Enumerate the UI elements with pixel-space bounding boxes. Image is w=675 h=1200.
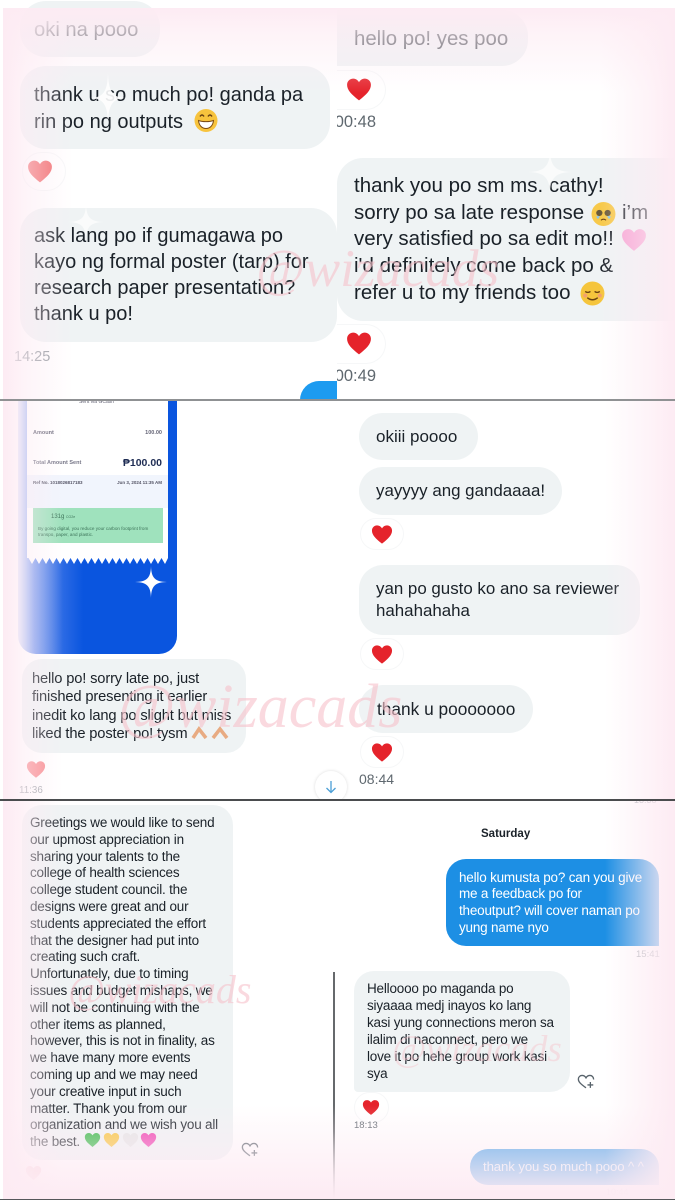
- receipt reference strip: Ref No. 1018026817183: [33, 480, 83, 485]
- message bubble: ask lang po: [20, 208, 337, 342]
- reaction: heart: [360, 736, 404, 768]
- message text: okiii poooo: okiii poooo: [376, 427, 457, 446]
- message text: greetings: will not be continuing with the: [30, 1000, 199, 1015]
- panel: chat screenshot 1: [3, 1, 675, 399]
- timestamp: 15:41: 15:41: [636, 949, 660, 960]
- message text: hello po sorry late: hello po! sorry late po, just: [32, 671, 199, 687]
- pink frame overlay: [3, 400, 675, 800]
- reaction: heart: [337, 70, 386, 110]
- message text: greetings: other items as planned,: [30, 1017, 166, 1032]
- message text: thank u pooooooo: thank u pooooooo: [377, 699, 515, 719]
- message text: hello po sorry late: [32, 671, 231, 742]
- watermark: @wizacads: [392, 1029, 562, 1070]
- reaction: heart: [360, 518, 404, 550]
- receipt amount row: [33, 430, 162, 436]
- receipt paper: [27, 400, 168, 558]
- message text: hello kumusta: me a feedback po for: [459, 886, 582, 901]
- message text: hello kumusta: hello kumusta po? can you give: [459, 870, 642, 884]
- watermark: @wizacads: [256, 240, 499, 298]
- message text: thank you po sm: sorry po sa late response: [354, 201, 584, 224]
- message text: helloooo po: kasi yung connections meron sa: [367, 1015, 554, 1030]
- message text: greetings: sharing your talents to the: [30, 849, 180, 864]
- receipt green notice: 131g CO2e: [51, 514, 75, 520]
- receipt total row: Total Amount Sent: [33, 460, 81, 466]
- message text: ask lang po: ask lang po if gumagawa po: [34, 225, 283, 247]
- message bubble: thank you so much: [470, 1149, 659, 1185]
- panel: chat screenshot 3: [3, 800, 675, 1199]
- message text: greetings: your creative input in such: [30, 1084, 181, 1099]
- message text: hello po sorry late: inedit ko lang po slight but miss: [32, 708, 231, 724]
- message text: greetings: college student council. the: [30, 882, 187, 897]
- message text: hello kumusta: theoutput? will cover naman po: [459, 903, 640, 918]
- divider line: [0, 799, 675, 801]
- receipt torn edge: [28, 558, 168, 564]
- message text: thank you so much: thank you so much pooo ^ ^: [483, 1159, 644, 1174]
- message bubble: yayyyy ang gandaaaa: [359, 467, 562, 515]
- receipt green notice: [33, 508, 163, 543]
- reaction: heart: [337, 324, 386, 364]
- panel: chat screenshot 2: [3, 400, 675, 799]
- message text: thank you po sm: thank you po sm ms. cathy!: [354, 174, 604, 197]
- message text: greetings: students appreciated the effort: [30, 916, 206, 931]
- reaction: heart: [27, 761, 46, 778]
- message text: ask lang po: research paper presentation?: [34, 277, 295, 299]
- message text: thank u so much: rin po ng outputs: [34, 110, 183, 132]
- pink frame overlay: [3, 800, 675, 1200]
- pink frame overlay: [3, 8, 675, 400]
- message text: i'm: i’m: [622, 201, 648, 224]
- message text: greetings: organization and we wish you all: [30, 1117, 218, 1132]
- message bubble: hello po yes poo: [337, 10, 528, 66]
- message text: greetings: we have many more events: [30, 1050, 190, 1065]
- sparkle: [136, 566, 166, 598]
- receipt green notice: transpo, paper, and plastic.: [38, 532, 93, 536]
- message text: greetings: Greetings we would like to send: [30, 815, 214, 830]
- icon: four coloured hearts: [84, 1133, 156, 1147]
- message bubble: thank u so much: [20, 66, 330, 149]
- message text: thank you po sm: [354, 174, 614, 304]
- message text: yan po gusto ko: hahahahaha: [376, 601, 470, 620]
- timestamp: 11:36: 11:36: [19, 785, 43, 796]
- message bubble: thank you po sm: [337, 158, 675, 321]
- message text: greetings: college of health sciences: [30, 865, 179, 880]
- sparkle: [74, 209, 98, 235]
- message text: oki na pooo: oki na pooo: [34, 19, 138, 41]
- message text: greetings: [30, 815, 218, 1149]
- receipt total row: [33, 457, 162, 469]
- watermark: @wizacads: [118, 673, 402, 741]
- blue circle fragment: [300, 381, 337, 400]
- divider line: [0, 1199, 675, 1200]
- message text: helloooo po: ilalim di naconnect, pero we: [367, 1032, 528, 1047]
- message text: hello po sorry late: liked the poster po! tysm: [32, 726, 187, 742]
- reaction: heart: [360, 638, 404, 670]
- message text: greetings: Unfortunately, due to timing: [30, 966, 188, 981]
- scroll down button: [315, 771, 347, 803]
- receipt reference strip: [27, 475, 168, 508]
- message text: helloooo po: siyaaaa medj inayos ko lang: [367, 998, 531, 1013]
- message text: greetings: designs were great and our: [30, 899, 188, 914]
- message text: thank you po sm: refer u to my friends too: [354, 281, 570, 304]
- message text: greetings: the best.: [30, 1134, 80, 1149]
- sparkle: [90, 79, 125, 120]
- reaction: heart: [22, 152, 66, 191]
- timestamp: 08:44: 08:44: [359, 771, 394, 787]
- receipt total row: ₱100.00: [123, 457, 162, 469]
- message bubble: greetings: [22, 805, 233, 1160]
- watermark: @wizacads: [68, 967, 251, 1012]
- message text: ask lang po: [34, 225, 309, 325]
- vertical divider: [333, 972, 335, 1200]
- message text: greetings: creating such craft.: [30, 949, 140, 964]
- message text: yan po gusto ko: yan po gusto ko ano sa reviewer: [376, 579, 619, 598]
- message bubble: yan po gusto ko: [359, 565, 640, 635]
- message text: greetings: coming up and we may need: [30, 1067, 198, 1082]
- message text: thank you po sm: i'd definitely come back po &: [354, 254, 613, 277]
- message text: helloooo po: [367, 981, 554, 1081]
- message text: greetings: matter. Thank you from our: [30, 1101, 187, 1116]
- timestamp: faint bottom: 10:44: [606, 1187, 629, 1197]
- message text: helloooo po: sya: [367, 1066, 387, 1081]
- message bubble: helloooo po: [354, 971, 570, 1092]
- icon: smiling face emoji: [580, 282, 604, 306]
- reaction: pale heart: [36, 1166, 41, 1172]
- message text: thank you po sm: very satisfied po sa edit mo!!: [354, 227, 614, 250]
- receipt amount row: 100.00: [145, 430, 162, 436]
- message text: hello po sorry late: finished presenting it earlier: [32, 689, 207, 705]
- icon: teary face emoji: [592, 202, 616, 226]
- message text: greetings: issues and budget mishaps, we: [30, 983, 213, 998]
- message bubble: oki na pooo: [20, 1, 160, 57]
- message bubble: thank u pooooooo: [359, 685, 533, 733]
- message bubble: hello kumusta: [446, 859, 659, 946]
- message text: thank u so much: [34, 84, 304, 132]
- message bubble: okiii poooo: [359, 413, 478, 460]
- receipt green notice: By going digital, you reduce your carbon footprint from: [38, 526, 148, 531]
- message text: helloooo po: Helloooo po maganda po: [367, 981, 513, 996]
- message text: hello po yes poo: hello po! yes poo: [354, 28, 508, 50]
- message bubble: hello po sorry late: [22, 659, 246, 753]
- icon: grinning emoji: [194, 109, 218, 132]
- message text: greetings: however, this is not in finality, as: [30, 1033, 215, 1048]
- payment receipt screenshot: [18, 400, 177, 654]
- message text: yan po gusto ko: [376, 579, 619, 620]
- divider line: [0, 399, 675, 401]
- message text: hello kumusta: [459, 870, 642, 935]
- sparkle: [534, 158, 566, 190]
- message text: greetings: our upmost appreciation in: [30, 832, 184, 847]
- receipt reference strip: Jun 3, 2024 11:35 AM: [117, 480, 162, 485]
- timestamp: 18:13: 18:13: [354, 1120, 378, 1131]
- message text: ask lang po: kayo ng formal poster (tarp) for: [34, 251, 309, 273]
- timestamp: 14:25: 14:25: [14, 349, 50, 365]
- heading: Saturday: Saturday: [481, 828, 530, 840]
- reaction: heart: [354, 1092, 389, 1123]
- message text: helloooo po: love it po hehe group work kasi: [367, 1049, 547, 1064]
- message text: greetings: that the designer had put into: [30, 933, 199, 948]
- receipt amount row: Amount: [33, 430, 54, 436]
- message text: yayyyy ang gandaaaa: yayyyy ang gandaaaa!: [376, 481, 545, 500]
- message text: hello kumusta: yung name nyo: [459, 920, 549, 935]
- message text: ask lang po: thank u po!: [34, 303, 133, 325]
- icon: add reaction: [578, 1074, 594, 1088]
- message text: thank u so much: thank u so much po! ganda pa: [34, 84, 303, 106]
- icon: add reaction: [242, 1142, 258, 1156]
- icon: pink heart emoji: [622, 229, 646, 251]
- icon: heart hands emoji: [192, 726, 228, 739]
